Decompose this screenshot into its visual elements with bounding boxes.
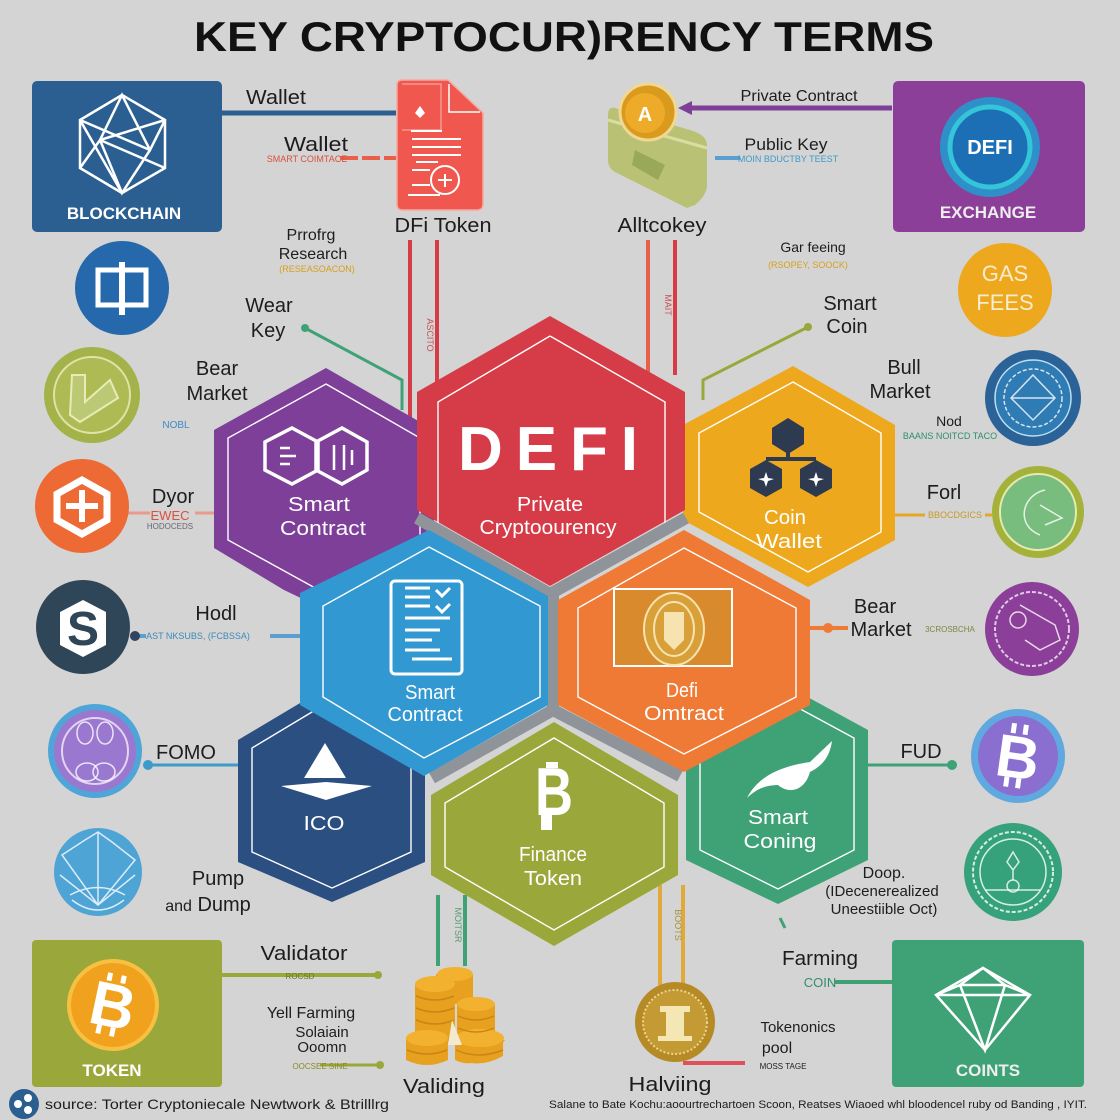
labels: HODOCEDS bbox=[147, 522, 193, 531]
hexagon: green whale bbox=[686, 682, 868, 904]
panel: exchange bbox=[893, 81, 1085, 232]
footer source: source: Torter Cryptoniecale Newtwork & Btrilllrg bbox=[45, 1096, 389, 1112]
icon: document bbox=[391, 581, 462, 674]
icon: whale bbox=[747, 741, 832, 798]
labels: Prrofrg bbox=[287, 227, 335, 244]
hexagon: navy ICO bbox=[238, 684, 425, 902]
labels: Farming bbox=[782, 948, 858, 970]
icon: bitcoin coin: B bbox=[84, 968, 142, 1045]
panel: coins: COINTS bbox=[956, 1061, 1020, 1080]
hexagon: blue smart contract: Contract bbox=[388, 704, 463, 726]
icon: network polyhedron bbox=[80, 95, 165, 193]
icon: orange box bbox=[35, 459, 129, 553]
hexagon: red defi bbox=[417, 316, 685, 586]
icon: triangle bbox=[281, 743, 372, 800]
icon: gas fees: GAS bbox=[982, 261, 1028, 286]
footer logo bbox=[9, 1089, 39, 1119]
labels bbox=[146, 87, 997, 1098]
panel: blockchain bbox=[32, 81, 222, 232]
hexagon: coin wallet yellow: Coin bbox=[764, 507, 806, 529]
hexagon: coin wallet yellow: Wallet bbox=[756, 531, 823, 553]
icon: green leaf coin bbox=[992, 466, 1084, 558]
hexagon: bear purple bbox=[214, 368, 434, 610]
labels: BAANS NOITCD TACO bbox=[903, 431, 997, 441]
labels: Uneestiible Oct) bbox=[831, 901, 937, 918]
icon: dark s badge: S bbox=[67, 603, 99, 656]
icon: purple coin bbox=[51, 707, 139, 795]
labels: Nod bbox=[936, 413, 962, 429]
labels: Private Contract bbox=[740, 88, 858, 105]
labels: Ooomn bbox=[297, 1039, 347, 1056]
labels: ROCSD bbox=[286, 972, 315, 981]
labels: AST NKSUBS, (FCBSSA) bbox=[146, 631, 250, 641]
hexagon: bear purple: Smart bbox=[288, 494, 351, 516]
labels: Yell Farming bbox=[267, 1005, 355, 1022]
labels: OOCSEE SINE bbox=[292, 1062, 348, 1071]
icon: token symbol: B bbox=[535, 754, 573, 830]
icon: blue badge bbox=[75, 241, 169, 335]
hexagon: orange defi contract: Defi bbox=[666, 680, 698, 702]
labels: Tokenonics bbox=[760, 1019, 836, 1036]
icon: banknote bbox=[614, 589, 732, 666]
gap bands between hexagons bbox=[417, 518, 686, 778]
icon: dark s badge bbox=[36, 580, 130, 674]
icon: blue circuit coin bbox=[985, 350, 1081, 446]
rotated line captions bbox=[425, 294, 683, 943]
labels: Validing bbox=[403, 1076, 485, 1098]
labels: Market bbox=[186, 383, 248, 405]
title: KEY CRYPTOCUR)RENCY TERMS bbox=[194, 13, 934, 60]
hexagon: red defi: Private bbox=[517, 494, 583, 516]
labels: (RSOPEY, SOOCK) bbox=[768, 260, 848, 270]
hexagon: blue smart contract bbox=[300, 530, 548, 776]
labels: MOIN BDUCTBY TEEST bbox=[738, 154, 839, 164]
hexagon: olive finance token bbox=[431, 722, 678, 946]
icon: coin safe: A bbox=[638, 104, 652, 126]
icon: blue web bbox=[54, 828, 142, 916]
labels: FOMO bbox=[156, 742, 216, 764]
labels: Alltcokey bbox=[618, 215, 706, 237]
icon: defi coin bbox=[940, 97, 1040, 197]
hexagon: red defi: DEFI bbox=[458, 415, 638, 484]
labels: (IDecenerealized bbox=[825, 883, 939, 900]
icon: purple bitcoin bbox=[971, 709, 1065, 803]
hexagon: blue smart contract: Smart bbox=[405, 682, 455, 704]
labels: Pump bbox=[192, 868, 244, 890]
labels: Research bbox=[279, 246, 347, 263]
labels: Key bbox=[251, 320, 285, 342]
rotated line captions: MAIT bbox=[663, 294, 673, 316]
icon: defi coin: DEFI bbox=[967, 137, 1013, 159]
labels: and Dump bbox=[165, 894, 251, 916]
labels: Doop. bbox=[863, 865, 905, 882]
labels: FUD bbox=[900, 741, 942, 763]
icon: purple bitcoin: B bbox=[992, 721, 1044, 794]
labels: COIN bbox=[804, 975, 836, 990]
labels: Halviing bbox=[628, 1074, 712, 1096]
labels: DFi Token bbox=[394, 215, 492, 237]
labels: Gar feeing bbox=[780, 239, 846, 255]
connector lines bbox=[128, 101, 992, 1069]
icon: linked hexes bbox=[265, 428, 367, 484]
icon: gas fees: FEES bbox=[976, 290, 1034, 315]
labels: Market bbox=[869, 381, 931, 403]
labels: Wear bbox=[245, 295, 293, 317]
icon: gas fees bbox=[958, 243, 1052, 337]
labels: MOSS TAGE bbox=[760, 1062, 806, 1071]
icon: red document bbox=[397, 80, 483, 210]
labels: Dyor bbox=[152, 486, 194, 508]
labels: 3CROSBCHA bbox=[925, 625, 976, 634]
footer note: Salane to Bate Kochu:aoourtrechartoen Scoon, Reatses Wiaoed whl bloodencel ruby od Banding , IYIT. bbox=[549, 1099, 1087, 1111]
icon: bitcoin coin bbox=[69, 961, 157, 1049]
icon: green coin bbox=[44, 347, 140, 443]
hexagon: red defi: Cryptoourency bbox=[480, 517, 616, 539]
panel: token: TOKEN bbox=[82, 1061, 142, 1080]
labels: Smart bbox=[823, 293, 877, 315]
labels: Coin bbox=[826, 316, 868, 338]
rotated line captions: BOOTS bbox=[673, 909, 683, 941]
labels: Validator bbox=[260, 943, 348, 965]
panel: exchange: EXCHANGE bbox=[940, 203, 1036, 222]
labels: Market bbox=[850, 619, 912, 641]
panel: coins bbox=[892, 940, 1084, 1087]
rotated line captions: ASCITO bbox=[425, 318, 435, 352]
labels: Bull bbox=[887, 357, 921, 379]
labels: (RESEASOACON) bbox=[279, 264, 355, 274]
labels: Public Key bbox=[744, 135, 828, 154]
side icons bbox=[35, 241, 1084, 921]
labels: Hodl bbox=[195, 603, 237, 625]
hexagon: green whale: Coning bbox=[744, 831, 816, 853]
icon: halving coin bbox=[635, 982, 715, 1062]
labels: EWEC bbox=[150, 508, 190, 523]
labels: Forl bbox=[927, 482, 961, 504]
icon: purple coin right bbox=[985, 582, 1079, 676]
hexagon: olive finance token: Finance bbox=[519, 844, 587, 866]
labels: pool bbox=[762, 1040, 792, 1057]
rotated line captions: MOITSR bbox=[453, 908, 463, 943]
labels: Bear bbox=[196, 358, 238, 380]
panel: blockchain: BLOCKCHAIN bbox=[67, 204, 181, 223]
icon: coin safe bbox=[608, 84, 707, 208]
labels: NOBL bbox=[162, 420, 190, 431]
labels: Solaiain bbox=[295, 1024, 349, 1041]
labels: SMART COIMTACE bbox=[267, 154, 347, 164]
hexagon: orange defi contract: Omtract bbox=[644, 703, 724, 725]
icon: cubes bbox=[750, 418, 832, 497]
hexagon: bear purple: Contract bbox=[280, 518, 366, 540]
hexagon: olive finance token: Token bbox=[524, 868, 582, 890]
hexagon: green whale: Smart bbox=[748, 807, 808, 829]
hexagon: orange defi contract bbox=[558, 530, 810, 772]
icon: diamond bbox=[936, 968, 1030, 1050]
labels: BBOCDGICS bbox=[928, 510, 982, 520]
icon: coin stacks bbox=[406, 967, 505, 1065]
labels: Wallet bbox=[284, 134, 349, 156]
hexagon: coin wallet yellow bbox=[683, 366, 895, 587]
labels: Wallet bbox=[246, 87, 306, 109]
icon: green ring coin bbox=[964, 823, 1062, 921]
hexagon: navy ICO: ICO bbox=[304, 813, 344, 835]
labels: Bear bbox=[854, 596, 896, 618]
panel: token bbox=[32, 940, 222, 1087]
